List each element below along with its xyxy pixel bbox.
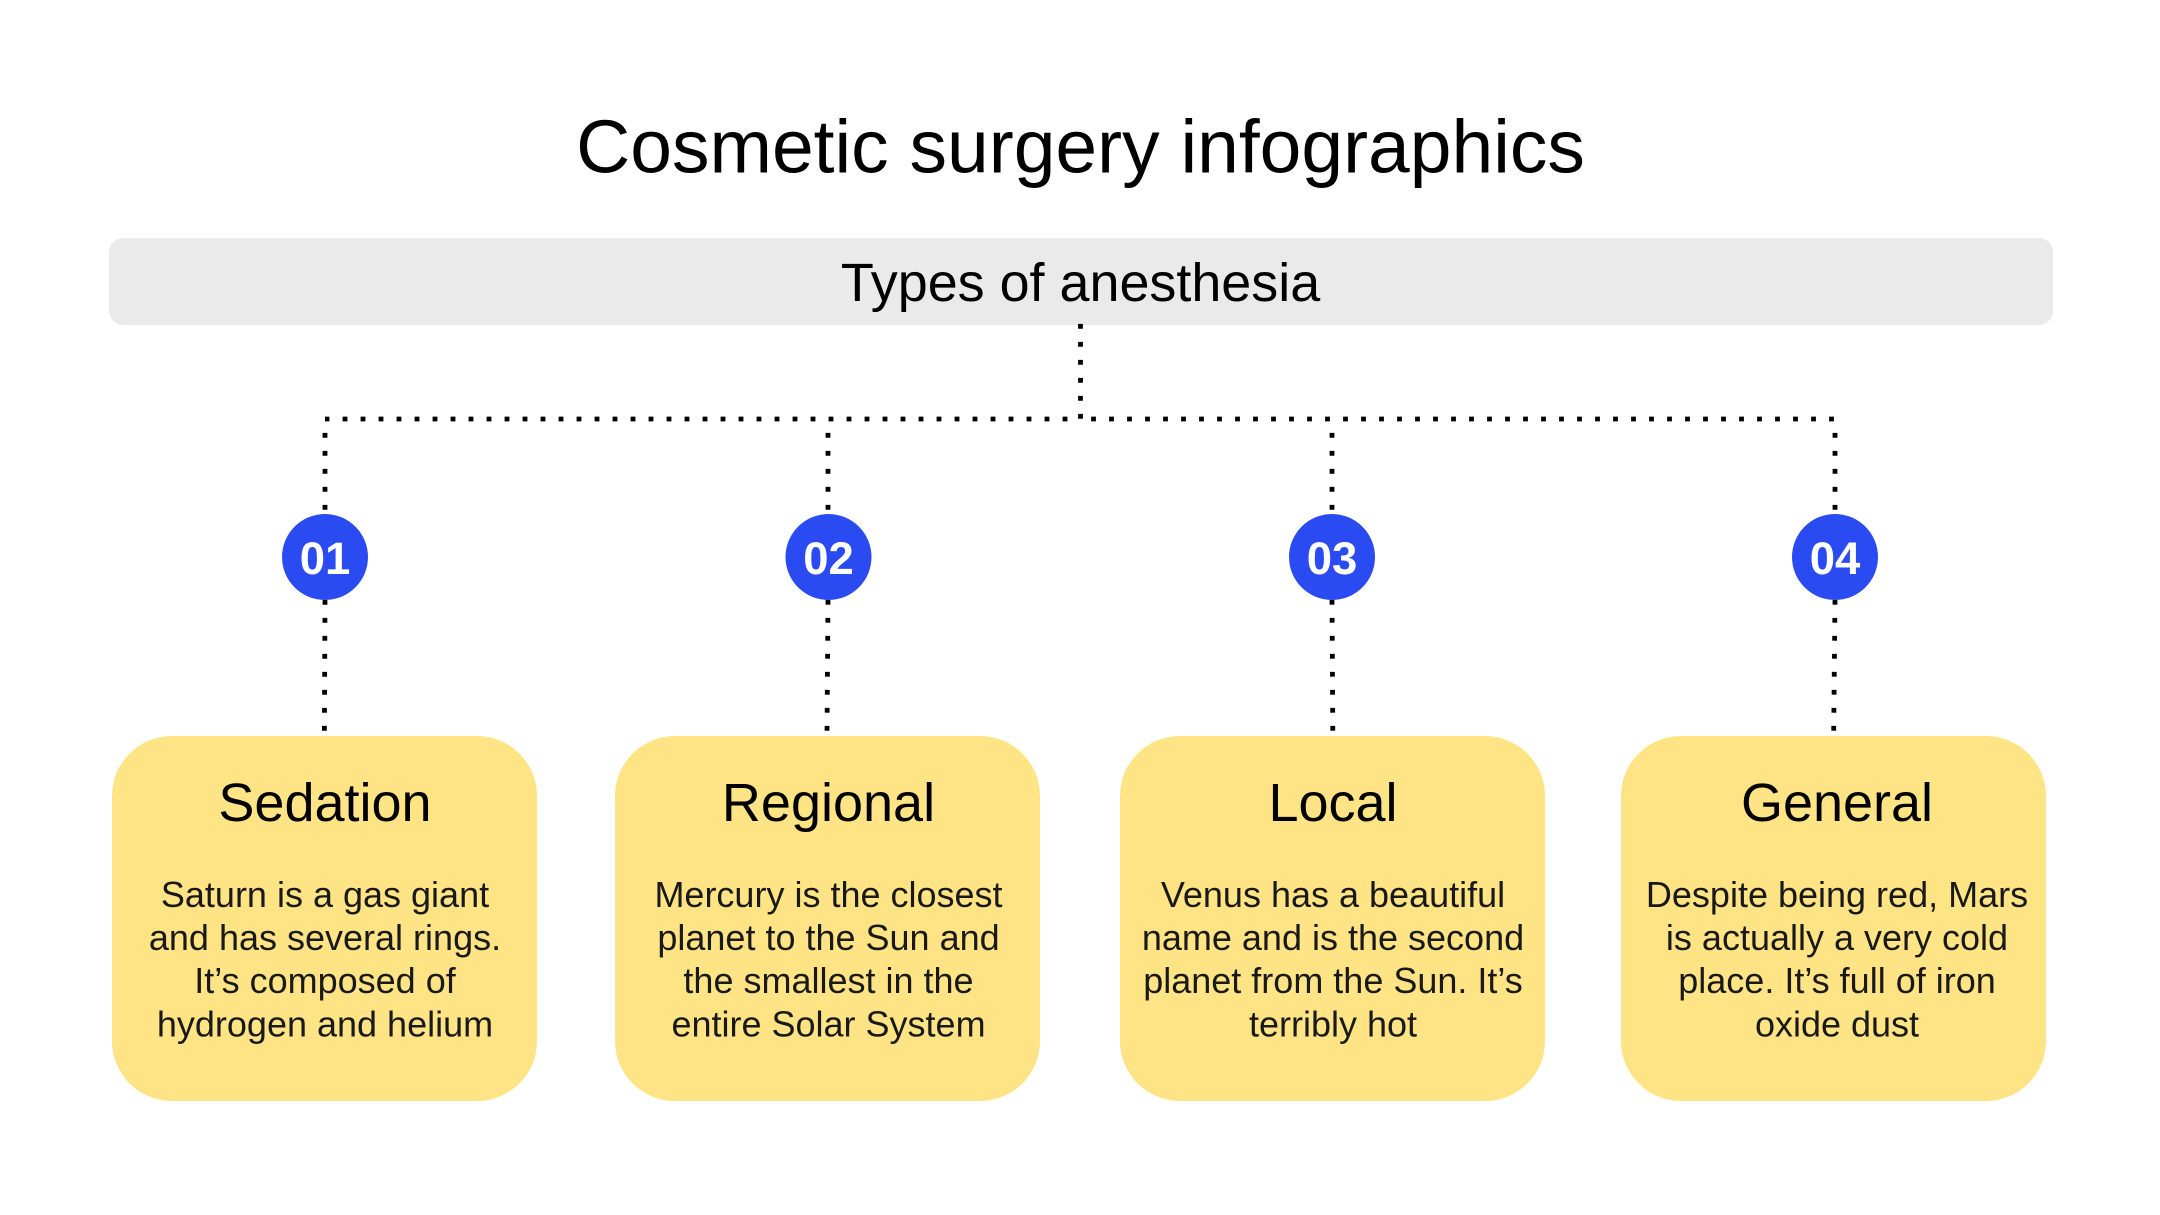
card: Local: planet from the Sun. It’s xyxy=(1143,960,1523,1001)
card: Local: Local xyxy=(1268,773,1398,833)
card: General: Despite being red, Mars xyxy=(1646,874,2028,915)
card: Local: Venus has a beautiful xyxy=(1161,874,1505,915)
card: General: place. It’s full of iron xyxy=(1678,960,1996,1001)
card: Local: name and is the second xyxy=(1142,917,1524,958)
step 01 badge: 01 xyxy=(300,533,350,584)
card: General: is actually a very cold xyxy=(1666,917,2008,958)
card: Local xyxy=(1120,736,1545,1101)
header bar: types of anesthesia xyxy=(109,238,2053,325)
step 04 badge xyxy=(1792,514,1878,600)
dotted connector tree xyxy=(324,324,1836,731)
card: Sedation: It’s composed of xyxy=(194,960,457,1001)
header bar: types of anesthesia: Types of anesthesia xyxy=(841,253,1320,313)
card: Regional: entire Solar System xyxy=(671,1003,986,1044)
card: Regional: the smallest in the xyxy=(683,960,974,1001)
step 01 badge xyxy=(282,514,368,600)
step 02 badge xyxy=(786,514,872,600)
card: Regional: planet to the Sun and xyxy=(657,917,1000,958)
card: Regional: Regional xyxy=(722,773,935,833)
card: General: oxide dust xyxy=(1755,1003,1919,1044)
card: Sedation: hydrogen and helium xyxy=(157,1003,493,1044)
card: Regional xyxy=(615,736,1040,1101)
title: Cosmetic surgery infographics xyxy=(576,105,1585,189)
step 03 badge xyxy=(1289,514,1375,600)
card: Regional: Mercury is the closest xyxy=(654,874,1003,915)
card: General: General xyxy=(1741,773,1933,833)
card: Sedation: and has several rings. xyxy=(149,917,501,958)
step 03 badge: 03 xyxy=(1307,533,1357,584)
card: Sedation: Sedation xyxy=(218,773,432,833)
step 02 badge: 02 xyxy=(803,533,854,584)
card: Sedation: Saturn is a gas giant xyxy=(161,874,489,915)
card: Sedation xyxy=(112,736,537,1101)
card: Local: terribly hot xyxy=(1249,1003,1417,1044)
step 04 badge: 04 xyxy=(1810,533,1861,584)
card: General xyxy=(1621,736,2046,1101)
